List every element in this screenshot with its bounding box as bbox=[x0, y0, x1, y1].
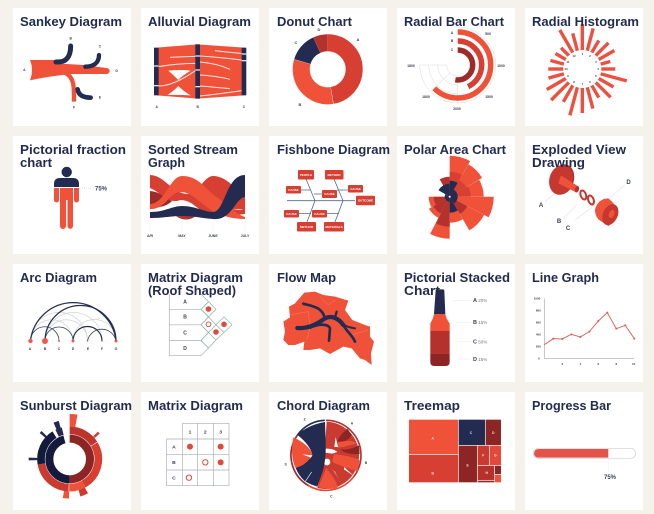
chart: roof matrix: D bbox=[183, 346, 187, 352]
panel: Radial Histogram bbox=[525, 8, 643, 126]
title line 2: Drawing bbox=[532, 155, 585, 170]
chart: roof matrix bbox=[169, 294, 232, 356]
chart: sankey flows: F bbox=[73, 105, 75, 109]
title: Fishbone Diagram bbox=[277, 142, 390, 157]
panel: Sorted Stream Graph bbox=[141, 136, 259, 254]
chart: chord: S bbox=[285, 462, 288, 466]
panel: Exploded View Drawing bbox=[525, 136, 643, 254]
radial histogram labels: 3 bbox=[595, 60, 597, 64]
radial bar labels: 1500 bbox=[485, 95, 493, 99]
radial histogram labels: 6 bbox=[589, 80, 591, 84]
panel: Fishbone Diagram bbox=[269, 136, 390, 254]
chart: treemap: H bbox=[485, 471, 488, 475]
chart: exploded parts bbox=[545, 162, 625, 228]
chart: chord: A bbox=[351, 422, 354, 426]
chart: line graph: 6 bbox=[597, 362, 599, 366]
chart: radial histogram bbox=[547, 24, 627, 115]
chart: sankey flows: B bbox=[69, 36, 72, 40]
title: Sankey Diagram bbox=[20, 14, 122, 29]
bottle legend: A 20% bbox=[473, 298, 487, 304]
panel: Line Graph bbox=[525, 264, 643, 382]
title: Flow Map bbox=[277, 270, 336, 285]
stream labels: MAY bbox=[178, 234, 186, 238]
panel: Matrix Diagram (Roof Shaped) bbox=[141, 264, 259, 382]
chart: stream graph bbox=[150, 170, 245, 232]
chart: roof matrix: A bbox=[183, 300, 187, 306]
chart: radial bars bbox=[420, 27, 496, 103]
stream labels: JULY bbox=[241, 234, 250, 238]
chart: treemap: D bbox=[492, 431, 495, 435]
title line 2: chart bbox=[20, 155, 53, 170]
chart: alluvial: B bbox=[196, 105, 199, 109]
radial histogram labels: 4 bbox=[597, 67, 599, 71]
panel: Pictorial Stacked Chart bbox=[397, 264, 515, 382]
title: Pictorial fraction bbox=[20, 142, 126, 157]
title: Matrix Diagram bbox=[148, 398, 243, 413]
chart: line graph: 0 bbox=[538, 356, 540, 360]
chart: alluvial: A bbox=[155, 105, 158, 109]
chart: line graph: 600 bbox=[536, 321, 541, 325]
radial bar labels: C bbox=[451, 48, 454, 52]
stream labels bbox=[147, 234, 250, 238]
radial bar labels: B bbox=[451, 39, 454, 43]
donut labels: C bbox=[295, 40, 298, 45]
radial histogram labels: 12 bbox=[572, 54, 576, 58]
chart: alluvial: C bbox=[243, 105, 246, 109]
radial bar labels: 2000 bbox=[453, 107, 461, 111]
chart: chord: Z bbox=[304, 417, 306, 421]
bottle legend: B 15% bbox=[473, 320, 487, 326]
arc nodes bbox=[28, 338, 117, 344]
title: Progress Bar bbox=[532, 398, 611, 413]
chart: fishbone bbox=[284, 170, 375, 232]
radial histogram labels: 2 bbox=[589, 54, 591, 58]
panel: Alluvial Diagram bbox=[141, 8, 259, 126]
title: Radial Bar Chart bbox=[404, 14, 505, 29]
part labels: A bbox=[539, 203, 544, 209]
radial bar labels: 1000 bbox=[497, 64, 505, 68]
chart: fishbone: CAUSE bbox=[286, 212, 297, 216]
chart: treemap bbox=[409, 420, 501, 482]
chart: fishbone: METHOD bbox=[300, 225, 314, 229]
arc labels: E bbox=[87, 347, 90, 351]
radial histogram labels: 8 bbox=[573, 80, 575, 84]
radial bar labels: A bbox=[451, 31, 454, 35]
panel: Progress Bar bbox=[525, 392, 643, 510]
radial histogram labels: 9 bbox=[567, 74, 569, 78]
chart: treemap: F bbox=[482, 454, 484, 458]
radial bar labels: 1800 bbox=[407, 64, 415, 68]
title: Polar Area Chart bbox=[404, 142, 507, 157]
chart: line graph: 8 bbox=[615, 362, 617, 366]
chart: line graph: 800 bbox=[536, 308, 541, 312]
chart: progress bar bbox=[533, 448, 636, 472]
chart: fishbone: CAUSE bbox=[288, 188, 299, 192]
bottle legend: C 50% bbox=[473, 340, 487, 346]
chart: chord: C bbox=[330, 494, 333, 498]
part labels: B bbox=[557, 219, 562, 225]
chart: fishbone: OUTCOME bbox=[358, 198, 373, 202]
radial histogram labels: 1 bbox=[581, 52, 583, 56]
chart: donut bbox=[293, 34, 363, 104]
chart: line graph: 2 bbox=[561, 362, 563, 366]
chart: treemap: E bbox=[467, 464, 470, 468]
arc labels: A bbox=[29, 347, 32, 351]
chart: roof matrix: B bbox=[183, 314, 187, 320]
title: Donut Chart bbox=[277, 14, 353, 29]
radial histogram labels: 5 bbox=[595, 74, 597, 78]
chart: line graph: 10 bbox=[632, 362, 636, 366]
chart: roof matrix: C bbox=[183, 330, 187, 336]
chart: matrix grid bbox=[167, 423, 229, 486]
chart: fishbone: CAUSE bbox=[350, 187, 361, 191]
chart: matrix grid: 1 bbox=[189, 429, 192, 435]
chart: matrix grid: C bbox=[172, 475, 176, 481]
chart: sankey flows bbox=[23, 36, 118, 109]
chart: flow map bbox=[283, 292, 374, 365]
chart: fishbone: CAUSE bbox=[324, 192, 335, 196]
chart: matrix grid: A bbox=[172, 444, 176, 450]
chart: treemap: B bbox=[431, 471, 434, 475]
title: Sunburst Diagram bbox=[20, 398, 132, 413]
bottle legend bbox=[473, 298, 487, 363]
radial bar labels bbox=[407, 31, 505, 111]
chart: sunburst bbox=[19, 408, 121, 510]
chart: alluvial bbox=[154, 44, 246, 109]
donut labels bbox=[295, 27, 360, 107]
title line 2: Chart bbox=[404, 283, 441, 298]
donut labels: A bbox=[357, 37, 360, 42]
chart: matrix grid: 2 bbox=[204, 429, 207, 435]
chart: treemap: C bbox=[470, 431, 473, 435]
radial bar labels: 1800 bbox=[422, 95, 430, 99]
arc labels: F bbox=[101, 347, 104, 351]
stream labels: JUNE bbox=[208, 234, 218, 238]
panel: Pictorial fraction chart bbox=[13, 136, 131, 254]
part labels: D bbox=[626, 180, 631, 186]
panel: Treemap bbox=[397, 392, 515, 510]
radial histogram labels: 10 bbox=[564, 67, 568, 71]
title: Radial Histogram bbox=[532, 14, 639, 29]
title: Treemap bbox=[404, 398, 460, 413]
title: Line Graph bbox=[532, 270, 599, 285]
chart: fishbone: METHOD bbox=[328, 173, 341, 177]
part labels: C bbox=[566, 226, 571, 232]
chart: person figure bbox=[54, 167, 79, 229]
callout: 75%: 75% bbox=[95, 186, 108, 192]
chart: sankey flows: D bbox=[115, 69, 118, 73]
chart: chord bbox=[277, 406, 375, 504]
chart: fishbone: CAUSE bbox=[314, 212, 325, 216]
title: Exploded View bbox=[532, 142, 627, 157]
title: Alluvial Diagram bbox=[148, 14, 251, 29]
chart: sankey flows: C bbox=[99, 44, 102, 48]
part labels bbox=[539, 180, 631, 232]
panel: Flow Map bbox=[269, 264, 387, 382]
title line 2: Graph bbox=[148, 155, 185, 170]
panel: Sunburst Diagram bbox=[13, 392, 132, 510]
chart: matrix grid: B bbox=[172, 460, 176, 466]
panel: Donut Chart bbox=[269, 8, 387, 126]
radial bar labels: 500 bbox=[485, 32, 491, 36]
arc labels: B bbox=[44, 347, 47, 351]
chart: line graph: 400 bbox=[536, 332, 541, 336]
arc labels: D bbox=[72, 347, 75, 351]
panel: Matrix Diagram bbox=[141, 392, 259, 510]
chart: line graph: 200 bbox=[536, 344, 541, 348]
chart: matrix grid: 3 bbox=[219, 429, 222, 435]
title: Sorted Stream bbox=[148, 142, 238, 157]
panel: Polar Area Chart bbox=[397, 136, 515, 254]
panel: Arc Diagram bbox=[13, 264, 131, 382]
panel: Sankey Diagram bbox=[13, 8, 131, 126]
radial histogram labels bbox=[564, 52, 599, 86]
chart: sankey flows: E bbox=[99, 95, 102, 99]
title: Pictorial Stacked bbox=[404, 270, 510, 285]
chart: arcs bbox=[30, 303, 116, 341]
title: Arc Diagram bbox=[20, 270, 97, 285]
chart: line graph bbox=[534, 297, 636, 366]
chart: polar area bbox=[423, 170, 476, 223]
title line 2: (Roof Shaped) bbox=[148, 283, 236, 298]
chart: fishbone: PEOPLE bbox=[300, 173, 312, 177]
title: Chord Diagram bbox=[277, 398, 370, 413]
stream labels: A/R bbox=[147, 234, 153, 238]
arc labels: C bbox=[58, 347, 61, 351]
bottle legend: D 15% bbox=[473, 357, 487, 363]
radial histogram labels: 11 bbox=[566, 60, 570, 64]
chart: fishbone: MATERIALS bbox=[325, 225, 343, 229]
donut labels: B bbox=[299, 102, 302, 107]
radial histogram labels: 7 bbox=[581, 82, 583, 86]
panel: Radial Bar Chart bbox=[397, 8, 515, 126]
chart: bottle bbox=[430, 289, 472, 366]
chart: sankey flows: A bbox=[23, 68, 26, 72]
chart: chord: B bbox=[365, 461, 368, 465]
chart: line graph: 1000 bbox=[534, 297, 541, 301]
title: Matrix Diagram bbox=[148, 270, 243, 285]
panel: Chord Diagram bbox=[269, 392, 387, 510]
chart: line graph: 4 bbox=[579, 362, 581, 366]
chart: treemap: G bbox=[494, 454, 497, 458]
progress value: 75% bbox=[604, 475, 617, 481]
arc labels bbox=[29, 347, 118, 351]
donut labels: D bbox=[318, 27, 321, 32]
chart: treemap: A bbox=[431, 436, 434, 440]
arc labels: G bbox=[115, 347, 118, 351]
